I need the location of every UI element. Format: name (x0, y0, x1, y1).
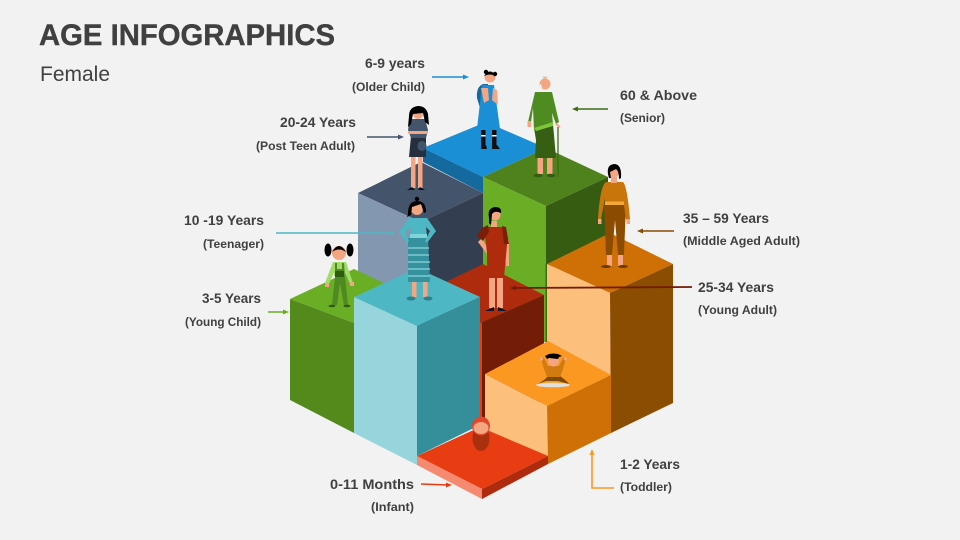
figure: post teen adult (407, 106, 429, 190)
label: 35-59 years: (Middle Aged Adult) (683, 236, 800, 248)
figure: senior (528, 76, 560, 177)
label: 25-34 years: (Young Adult) (698, 305, 777, 317)
arrow: 10-19 years (276, 230, 395, 236)
label: 6-9 years: 6-9 years (365, 56, 425, 71)
label: 20-24 years (256, 115, 356, 153)
block: 1-2 years (toddler, orange) (485, 341, 611, 464)
block: 35-59 years (orange) (547, 233, 673, 433)
arrow: 6-9 years (432, 74, 469, 80)
block: 6-9 years (blue) (423, 122, 546, 193)
label: 0-11 months (330, 477, 414, 514)
label: 20-24 years: 20-24 Years (280, 115, 356, 130)
label: 60 and above: 60 & Above (620, 88, 698, 103)
label: 35-59 years (683, 211, 800, 248)
block: 20-24 years (slate) (358, 162, 483, 340)
label: 25-34 years (698, 280, 777, 317)
arrow: 0-11 months (421, 482, 452, 488)
label: 25-34 years: 25-34 Years (698, 280, 774, 295)
figure: toddler (536, 354, 570, 387)
subtitle: Female (40, 63, 110, 86)
figure: middle aged adult (598, 164, 630, 268)
arrow: 25-34 years (510, 286, 692, 290)
block: 10-19 years (teal) (354, 268, 480, 465)
label: 10-19 years (184, 213, 264, 251)
label: 10-19 years: 10 -19 Years (184, 213, 264, 228)
block: 0-11 months (infant tile) (417, 427, 548, 499)
arrow: 20-24 years (367, 134, 404, 140)
figure: older child (477, 70, 500, 149)
label: 35-59 years: 35 – 59 Years (683, 211, 769, 226)
label: 6-9 years: (Older Child) (352, 82, 425, 94)
label: 20-24 years: (Post Teen Adult) (256, 141, 355, 153)
figure: infant (472, 416, 490, 451)
label: 1-2 years (620, 457, 680, 494)
title: AGE INFOGRAPHICS (39, 19, 335, 52)
block: 3-5 years (light green) (290, 269, 418, 433)
block: 60 and above (green) (483, 148, 608, 342)
label: 1-2 years: 1-2 Years (620, 457, 680, 472)
figure: young child in overalls (324, 244, 354, 307)
label: 0-11 months: 0-11 Months (330, 477, 414, 492)
label: 60 and above: (Senior) (620, 113, 665, 125)
label: 3-5 years (185, 291, 261, 329)
arrow: 35-59 years (637, 228, 674, 234)
label: 1-2 years: (Toddler) (620, 482, 672, 494)
label: 3-5 years: (Young Child) (185, 317, 261, 329)
label: 6-9 years (352, 56, 425, 94)
arrow: 1-2 years (590, 449, 614, 488)
label: 0-11 months: (Infant) (371, 502, 414, 514)
label: 3-5 years: 3-5 Years (202, 291, 261, 306)
arrow: 3-5 years (268, 310, 289, 314)
label: 60 and above (620, 88, 698, 125)
figure: teenager (399, 197, 436, 300)
label: 10-19 years: (Teenager) (203, 239, 264, 251)
arrow: 60 and above (572, 106, 608, 112)
figure: young adult in red dress (477, 207, 509, 311)
block: 25-34 years (red) (417, 264, 544, 432)
